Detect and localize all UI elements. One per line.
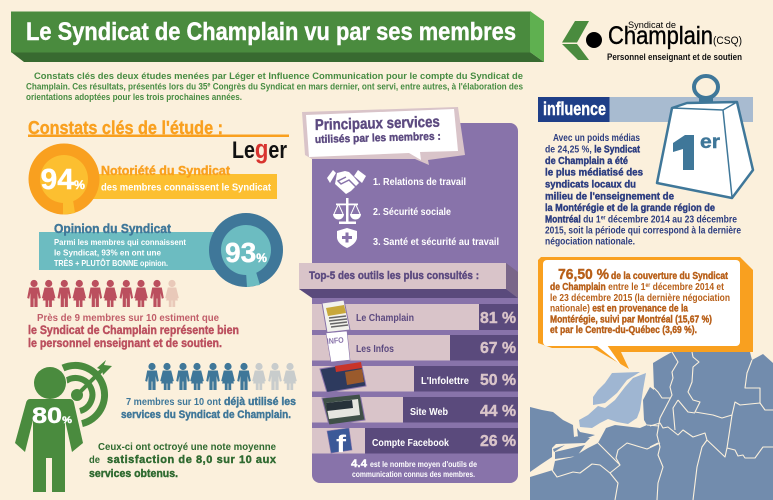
- services list: 3. Santé et sécurité au travail: [373, 237, 499, 248]
- text: 9 of 10 members: le Syndicat de Champlain représente bien: [28, 325, 239, 337]
- text: 9 of 10 members: le personnel enseignant et de soutien.: [28, 338, 222, 350]
- bar: Les Infos 67%: INFO: [326, 336, 344, 346]
- speech bubble: principaux services: utilisés par les membres :: [315, 131, 441, 146]
- pictogram: 9 of 10 members: [27, 280, 179, 307]
- introduction text: Constats clés des deux études menées par Léger et Influence Communication pour le compte du Syndicat de: [34, 71, 523, 81]
- logo: Leger: Leger: [232, 134, 287, 164]
- notoriete text: des membres connaissent le Syndicat: [101, 182, 272, 194]
- heading: Constats clés de l'étude: Constats clés de l'étude :: [28, 117, 223, 138]
- opinion heading: Opinion du Syndicat: [54, 222, 172, 236]
- bar: Compte Facebook 26%: [312, 428, 518, 458]
- 94 percent: 94%: [40, 164, 85, 196]
- text: satisfaction: Ceux-ci ont octroyé une note moyenne: [98, 442, 276, 453]
- text: satisfaction: satisfaction de 8,0 sur 10 aux: [107, 454, 277, 466]
- text: average tools: est le nombre moyen d'outils de: [370, 460, 477, 469]
- text: influence paragraph: syndicats locaux du: [545, 180, 636, 190]
- text: 7 of 10 members: [121, 396, 296, 421]
- bar: Compte Facebook 26%: f: [336, 431, 347, 458]
- logo: Syndicat de Champlain: (CSQ): [713, 35, 742, 47]
- 93 percent: 93%: [225, 237, 267, 268]
- bar: L'Infolettre 50%: 50 %: [480, 372, 516, 389]
- bar: Compte Facebook 26%: Compte Facebook: [372, 437, 449, 449]
- text: influence paragraph: Montréal du 1er décembre 2014 au 23 décembre: [545, 214, 737, 226]
- callout text: le 23 décembre 2015 (la dernière négociation: [550, 293, 730, 304]
- text: average tools: 4.4: [351, 458, 368, 470]
- pictogram: 7 of 10 members: [145, 363, 297, 390]
- text: influence paragraph: de 24,25 %, le Syndicat: [545, 144, 641, 156]
- callout text: [550, 266, 730, 336]
- bar: Les Infos 67%: 67 %: [480, 340, 516, 357]
- text: 9 of 10 members: Près de 9 membres sur 10 estiment que: [37, 313, 219, 324]
- bar: L'Infolettre 50%: [312, 362, 518, 392]
- introduction text: [26, 71, 523, 102]
- logo: Syndicat de Champlain: Champlain: [608, 22, 713, 50]
- callout text: Montérégie, suivi par Montréal (15,67 %): [550, 314, 712, 326]
- icon: scales: [333, 198, 361, 224]
- bar: Le Champlain 81%: Le Champlain: [356, 312, 414, 324]
- text: average tools: communication connus des membres.: [352, 470, 475, 479]
- text: influence paragraph: le plus médiatisé des: [545, 168, 643, 178]
- text: 9 of 10 members: [28, 313, 239, 350]
- bar: L'Infolettre 50%: L'Infolettre: [421, 375, 469, 387]
- introduction text: orientations adoptées pour les trois prochaines années.: [26, 92, 242, 102]
- notoriete heading: Notoriété du Syndicat: [101, 164, 231, 178]
- bar: Les Infos 67%: Les Infos: [356, 343, 394, 355]
- text: influence paragraph: [545, 133, 741, 248]
- text: satisfaction: services obtenus.: [89, 468, 178, 480]
- influence band: influence: [543, 99, 606, 119]
- bar: Le Champlain 81%: [312, 300, 518, 332]
- opinion text: Parmi les membres qui connaissent: [54, 237, 186, 247]
- speech bubble: principaux services: Principaux services: [315, 114, 440, 134]
- services list: [373, 177, 499, 248]
- text: satisfaction: [89, 442, 277, 480]
- bar: Le Champlain 81%: 81 %: [480, 310, 516, 327]
- heading band: top-5: [299, 263, 518, 298]
- bar: Site Web 44%: [312, 394, 518, 425]
- bar: Les Infos 67%: [312, 331, 518, 362]
- 80 percent: 80 %: [32, 403, 72, 428]
- panel: notoriete 94%: [28, 144, 277, 214]
- text: influence paragraph: négociation nationale.: [545, 236, 635, 248]
- text: average tools: [351, 458, 477, 479]
- influence band: [538, 97, 753, 122]
- logo: Syndicat de Champlain: Syndicat de: [628, 20, 676, 30]
- text: 7 of 10 members: services du Syndicat de Champlain.: [121, 409, 291, 421]
- bar: Site Web 44%: 44 %: [480, 403, 516, 420]
- callout: 76,50 % coverage: [538, 257, 753, 369]
- icon: weight 1er: er: [700, 132, 721, 153]
- callout text: 76,50 %: [558, 266, 609, 283]
- services list: 2. Sécurité sociale: [373, 207, 451, 218]
- text: influence paragraph: Avec un poids médias: [553, 133, 640, 144]
- services list: 1. Relations de travail: [373, 177, 466, 188]
- icon: weight 1er: [657, 76, 753, 198]
- callout text: et par le Centre-du-Québec (3,69 %).: [550, 325, 697, 336]
- heading band: top-5: Top-5 des outils les plus consultés :: [309, 270, 479, 282]
- opinion text: TRÈS + PLUTÔT BONNE opinion.: [54, 257, 168, 268]
- text: 7 of 10 members: 7 membres sur 10 ont: [126, 397, 222, 408]
- speech bubble: principaux services: [302, 107, 465, 165]
- icon: person with target 80%: [15, 360, 112, 492]
- callout text: de la couverture du Syndicat: [611, 271, 729, 282]
- text: satisfaction: de: [89, 455, 100, 466]
- bar: Compte Facebook 26%: 26 %: [480, 433, 516, 450]
- text: influence paragraph: la Montérégie et de la grande région de: [545, 203, 715, 214]
- map of Quebec regions: [530, 352, 773, 500]
- text: influence paragraph: de Champlain a été: [545, 156, 628, 167]
- icon: handshake: [327, 170, 366, 194]
- text: influence paragraph: milieu de l'enseignement de: [545, 192, 674, 202]
- callout text: nationale) est en provenance de la: [550, 304, 688, 314]
- opinion text: [54, 237, 186, 268]
- text: 7 of 10 members: déjà utilisé les: [224, 396, 296, 408]
- logo: Syndicat de Champlain: Personnel enseignant et de soutien: [607, 52, 742, 62]
- text: influence paragraph: 2015, soit la période qui correspond à la dernière: [545, 226, 741, 236]
- bar: Site Web 44%: Site Web: [410, 406, 448, 418]
- panel: opinion 93%: [39, 213, 283, 287]
- opinion text: le Syndicat, 93% en ont une: [54, 248, 161, 258]
- title: Le Syndicat de Champlain vu par ses membres: [26, 18, 516, 46]
- title banner: [11, 11, 544, 62]
- panel: services and tools: [299, 107, 518, 483]
- callout text: de Champlain entre le 1er décembre 2014 et: [550, 282, 725, 293]
- introduction text: Champlain. Ces résultats, présentés lors du 35e Congrès du Syndicat en mars dernier, ont servi, entre autres, à l'élaboration des: [26, 82, 523, 92]
- logo: Syndicat de Champlain: [562, 20, 742, 62]
- icon: shield: [337, 228, 357, 248]
